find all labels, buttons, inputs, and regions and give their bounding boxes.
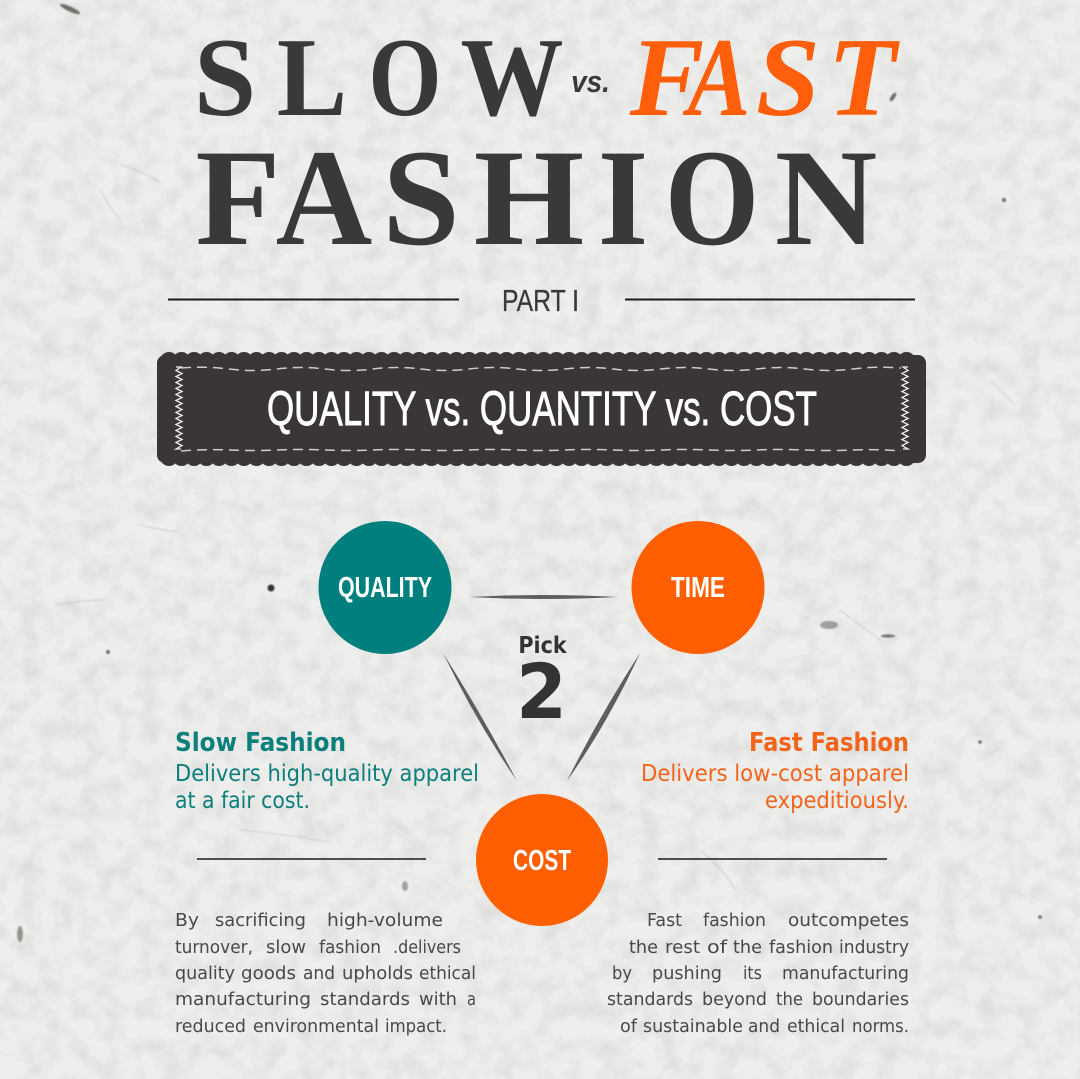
fast fashion body text: the [776,990,803,1010]
slow fashion body text: reduced [175,1017,246,1037]
slow fashion body text: goods [241,964,296,984]
fast fashion body text: industry [839,938,909,958]
slow fashion body text: ethical [419,964,476,984]
title word: FASHION: I [598,121,648,274]
slow fashion body text: with [419,990,457,1010]
fast fashion body text: fashion [769,938,833,958]
fast fashion body text: outcompetes [788,911,909,931]
node: cost: COST [513,845,571,877]
fast fashion summary: Delivers low-cost apparel [641,761,909,787]
node: quality: QUALITY [338,572,432,604]
fast fashion body text: the [629,938,658,958]
slow fashion body text: and [303,964,335,984]
fast fashion summary: Fast Fashion [749,728,909,758]
slow fashion summary: at a fair cost. [175,788,310,814]
title connector: vs.: vs. [571,65,610,99]
slow fashion body text: quality [175,964,235,984]
fast fashion body text: boundaries [812,990,909,1010]
fast fashion summary [641,728,909,814]
fast fashion body text: the [733,938,762,958]
title word: FASHION: A [276,122,372,274]
fast fashion body text: norms. [852,1017,909,1037]
slow fashion body text: upholds [342,964,413,984]
slow fashion body text: By [175,911,199,931]
slow fashion summary [175,728,479,814]
title word: SLOW [194,15,564,140]
fast fashion body text: Fast [647,911,682,931]
slow fashion body text: turnover, [175,938,253,958]
title word: FAST: A [682,16,750,140]
fast fashion body text: sustainable [643,1017,743,1037]
divider right [658,858,887,860]
slow fashion body text: fashion [319,938,381,958]
title word: FAST: S [756,16,820,140]
banner: quality vs quantity vs cost [157,355,926,463]
connector: time to cost [567,653,640,781]
center label: pick 2: Pick [518,633,567,659]
fast fashion body text [607,911,909,1037]
title word: FAST [629,16,901,140]
slow fashion body text [175,911,476,1037]
title word: SLOW: O [368,16,442,140]
fast fashion body text: rest [665,938,700,958]
fast fashion body text: and [748,1017,780,1037]
fast fashion summary: expeditiously. [765,788,909,814]
slow fashion summary: Slow Fashion [175,728,346,758]
slow fashion body text: environmental [253,1017,379,1037]
fast fashion body text: manufacturing [782,964,909,984]
divider left [197,858,426,860]
connector: quality to cost [443,653,517,781]
slow fashion body text: slow [266,938,306,958]
title: SLOW vs. FAST FASHION [194,15,901,275]
fast fashion body text: of [620,1017,638,1037]
slow fashion body text: .delivers [393,938,461,958]
title word: FASHION: N [775,122,877,275]
banner: quality vs quantity vs cost: QUALITY vs. QUANTITY vs. COST [267,383,817,436]
title word: FASHION [195,121,877,275]
fast fashion body text: by [612,964,632,984]
fast fashion body text: beyond [702,990,767,1010]
title word: FASHION: H [474,122,584,275]
title word: FAST: F [629,16,704,140]
node: time: TIME [671,572,725,604]
fast fashion body text: ethical [787,1017,845,1037]
fast fashion body text: pushing [652,964,722,984]
node: quality [318,521,452,654]
title word: FASHION: F [195,121,281,274]
title word: SLOW: S [194,16,256,140]
connector: quality to time [469,595,617,599]
title word: FASHION: S [382,121,460,274]
title word: SLOW: W [460,16,564,140]
title word: SLOW: L [277,15,347,140]
title word: FASHION: O [665,122,759,275]
center label: pick 2: 2 [516,648,567,736]
fast fashion body text: standards [607,990,693,1010]
slow fashion body text: impact. [385,1017,447,1037]
part heading with rules: PART I [502,283,579,318]
slow fashion body text: sacrificing [215,911,306,931]
fast fashion body text: its [743,964,762,984]
title word: FAST: T [828,16,901,140]
fast fashion body text: of [707,938,728,958]
fast fashion body text: fashion [703,911,766,931]
slow fashion body text: standards [320,990,410,1010]
node: cost [476,794,608,926]
slow fashion body text: manufacturing [175,990,311,1010]
slow fashion summary: Delivers high-quality apparel [175,761,479,787]
slow fashion body text: a [467,990,476,1010]
node: time [632,521,764,654]
slow fashion body text: high-volume [327,911,443,931]
triangle diagram [318,521,764,926]
